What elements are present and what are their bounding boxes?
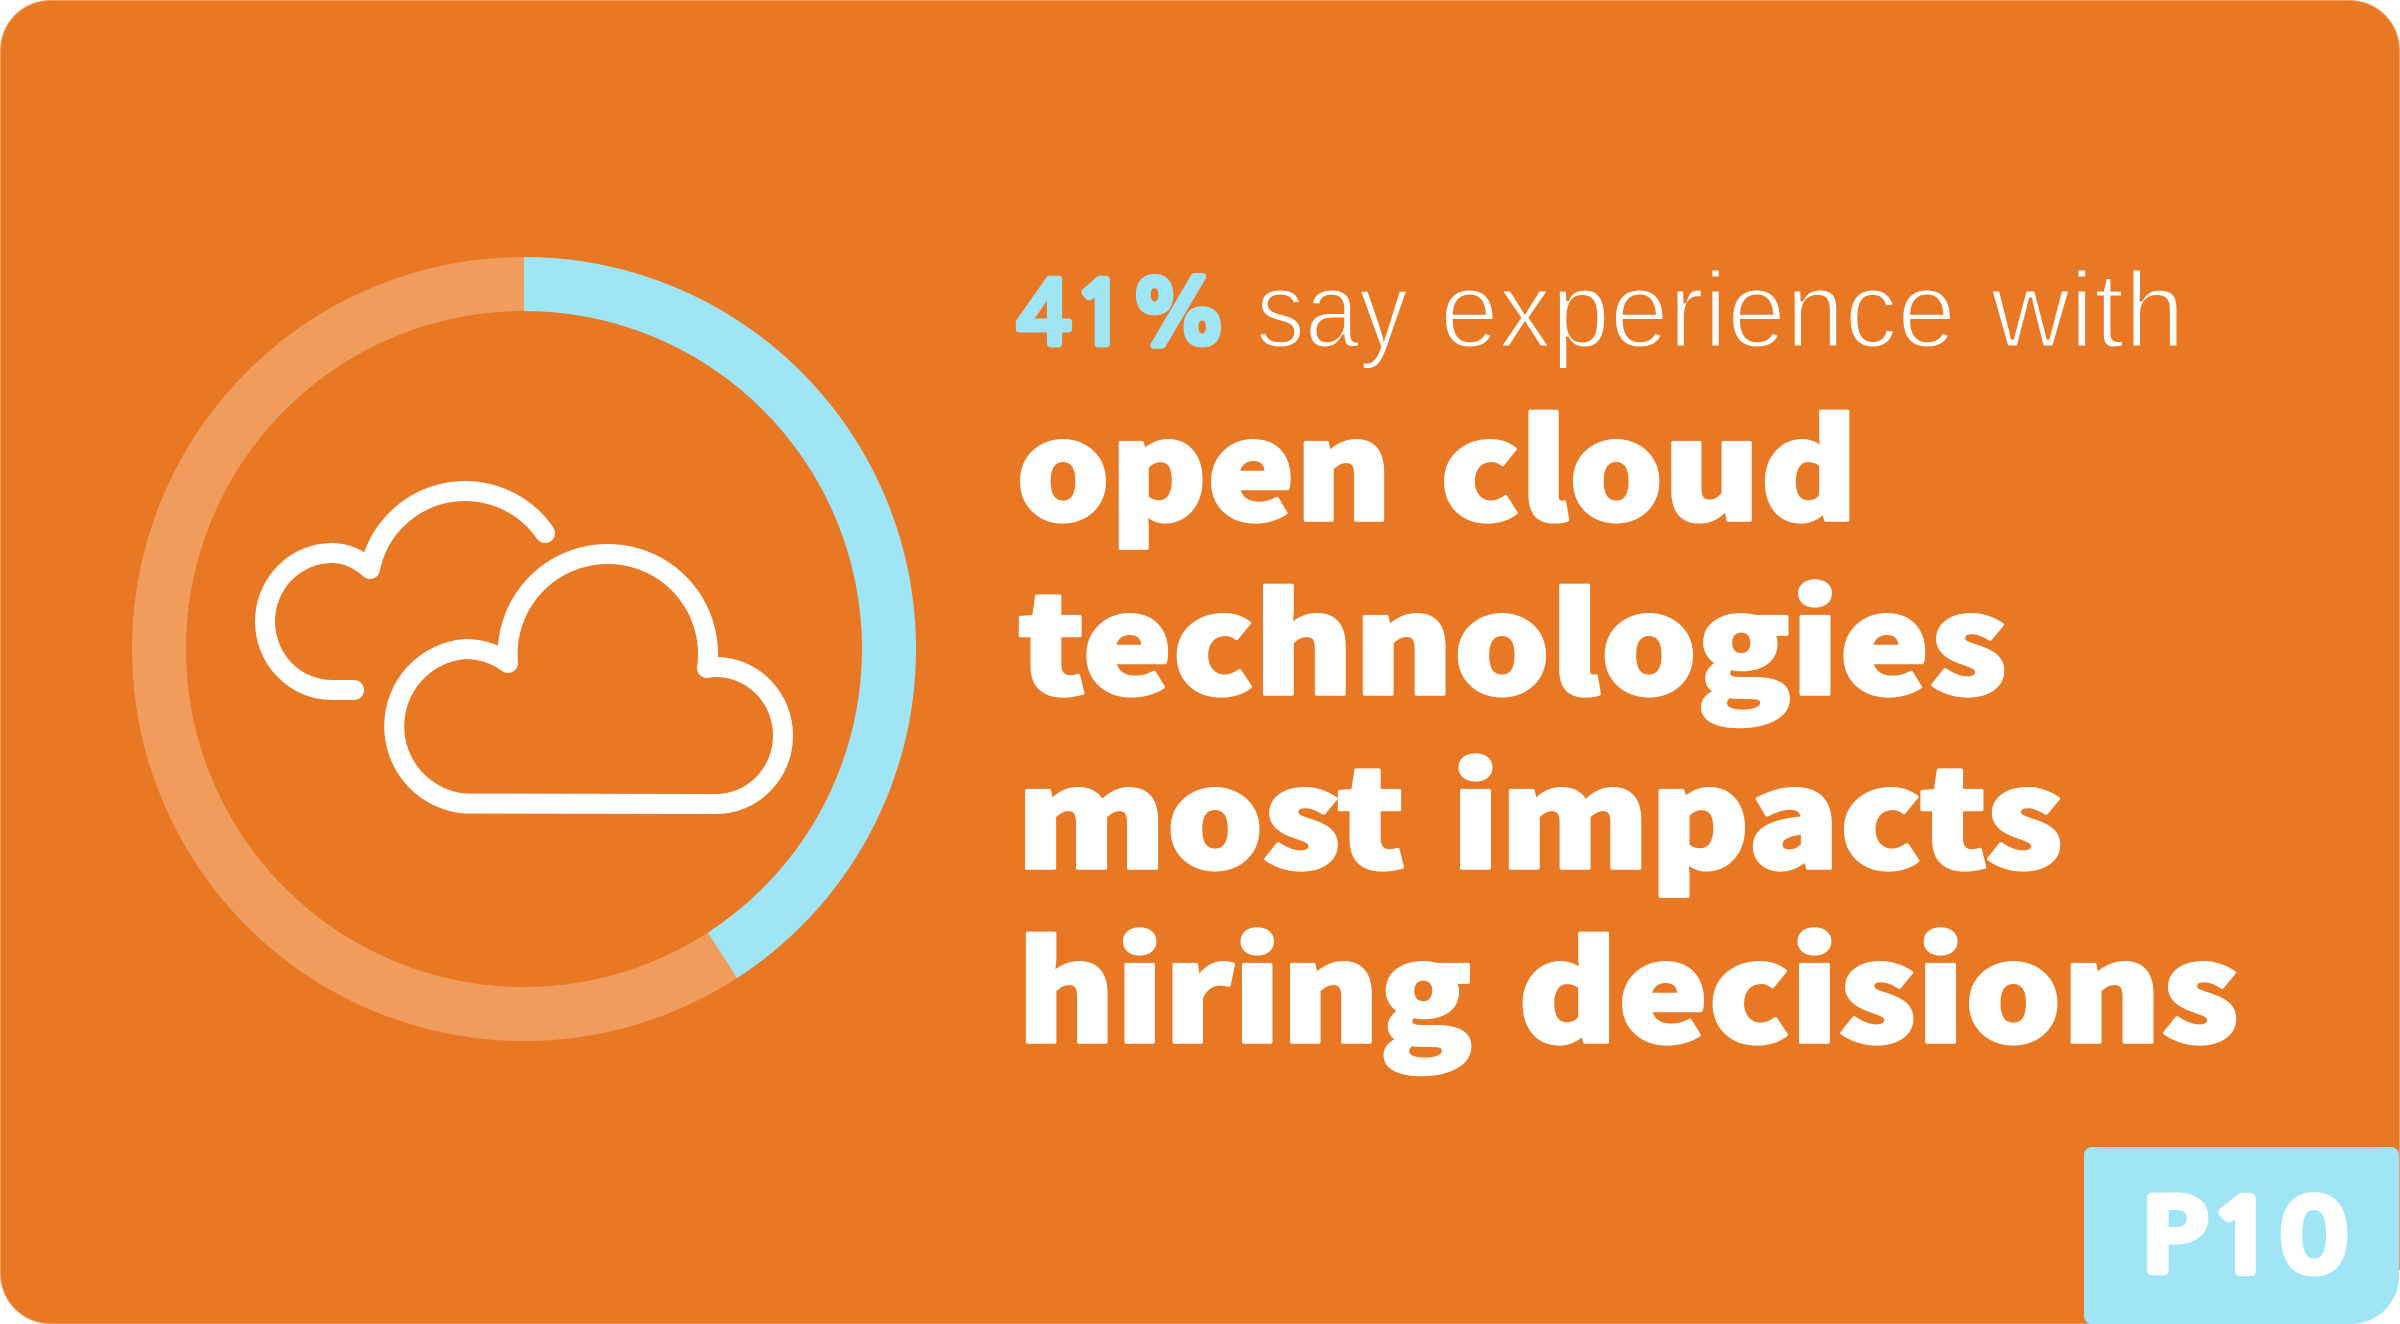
stat: 41%: 41%	[1016, 272, 1229, 358]
intro line	[1016, 249, 2185, 370]
headline word: decisions: decisions	[1518, 885, 2239, 1082]
headline word: most: most	[1016, 711, 1405, 908]
back cloud	[265, 491, 545, 690]
tag corner backing	[2340, 1270, 2400, 1324]
headline word: cloud: cloud	[1440, 363, 1858, 560]
donut track	[159, 284, 889, 1014]
page tag: P10	[2084, 1147, 2400, 1324]
tag label: P10	[2140, 1188, 2349, 1287]
headline line: technologies: technologies	[1018, 537, 2007, 734]
headline word: impacts: impacts	[1451, 711, 2063, 908]
front cloud	[394, 554, 783, 804]
icon: two clouds	[265, 491, 783, 804]
headline word: hiring: hiring	[1017, 885, 1472, 1082]
intro word: experience: experience	[1440, 249, 1956, 370]
intro word: with: with	[1990, 249, 2185, 370]
headline word: open: open	[1016, 363, 1392, 560]
intro word: say: say	[1256, 249, 1408, 370]
tag shape	[2084, 1147, 2399, 1324]
donut chart: 41%	[159, 284, 889, 1014]
headline	[1016, 363, 2239, 1082]
donut value arc 41%	[524, 284, 889, 955]
